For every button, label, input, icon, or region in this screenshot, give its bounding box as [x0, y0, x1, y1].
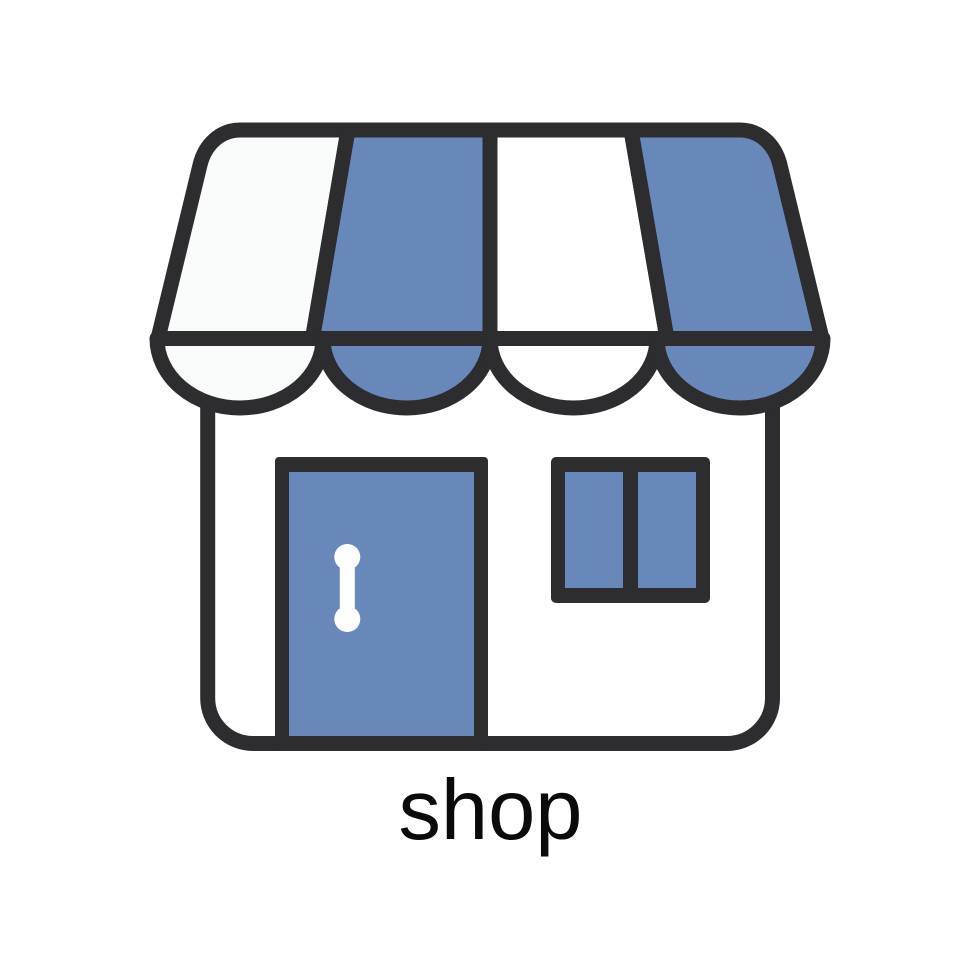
awning stripe 3	[490, 130, 667, 338]
awning stripe 2	[312, 130, 490, 338]
awning stripe 1	[158, 130, 348, 338]
label: shop: shop	[398, 763, 582, 858]
icon: shop	[157, 130, 823, 751]
awning stripe 4	[631, 130, 822, 338]
building wall	[208, 400, 772, 744]
window	[551, 457, 710, 603]
valance scallop 2	[323, 338, 490, 408]
door handle	[334, 544, 360, 632]
door	[275, 457, 488, 751]
awning	[157, 130, 823, 408]
valance scallop 3	[490, 338, 657, 408]
valance scallop 1	[157, 338, 323, 408]
valance scallop 4	[657, 338, 823, 408]
